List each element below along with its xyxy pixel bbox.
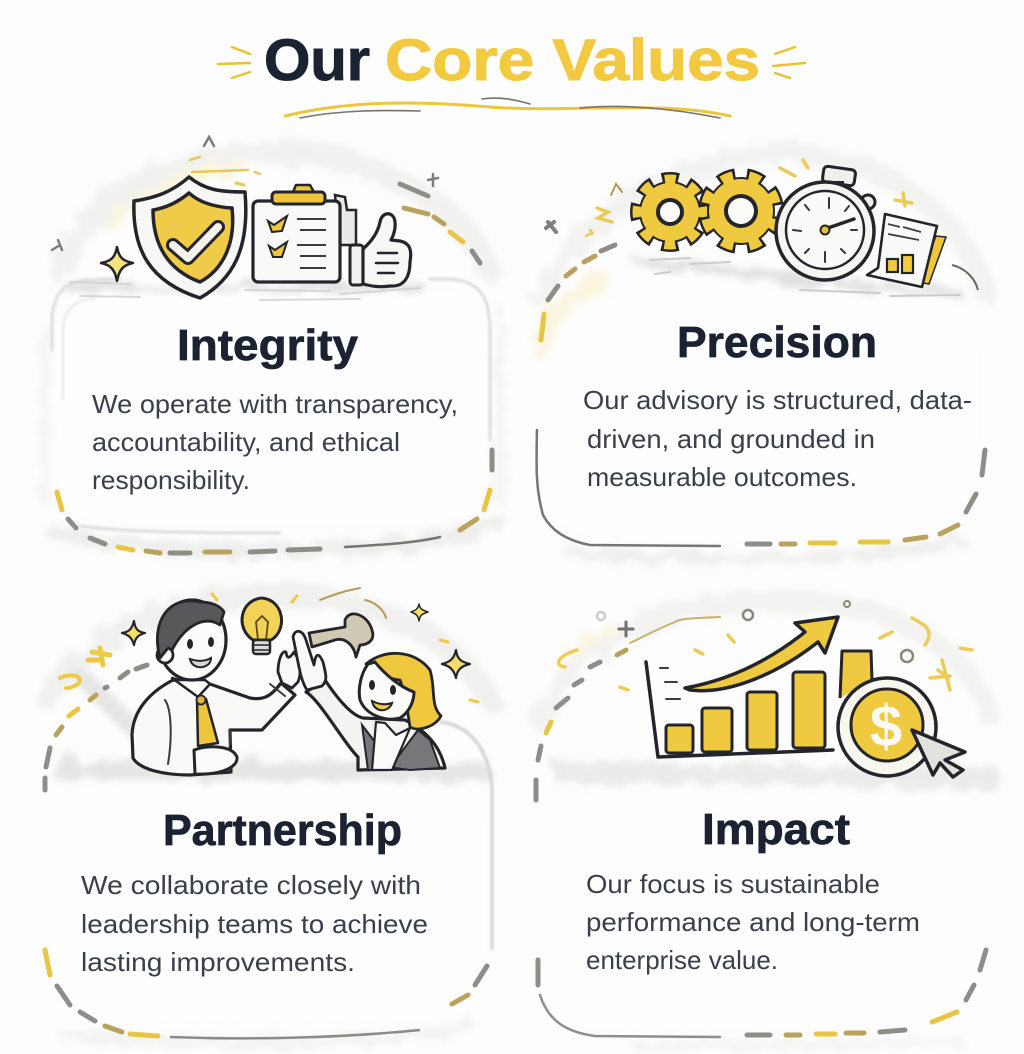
- icon: cursor: [912, 730, 965, 777]
- icon: woman: [293, 631, 445, 770]
- heading: integrity: Integrity: [177, 321, 359, 370]
- wash: precision: [540, 152, 985, 559]
- card outline: impact: [546, 795, 976, 1026]
- icon: dollar coin: $: [870, 694, 902, 759]
- text: partnership: [81, 870, 428, 977]
- text: impact: [586, 869, 920, 975]
- icon: wrench: [309, 614, 373, 657]
- icon: stopwatch: [776, 166, 875, 280]
- text: precision: Our advisory is structured, data-: [583, 385, 972, 415]
- title: Our: [264, 28, 370, 93]
- title: [218, 28, 805, 118]
- wash: partnership: [45, 595, 490, 1043]
- dashed border: precision: [537, 245, 985, 546]
- title: Core Values: [385, 28, 760, 93]
- text: precision: driven, and grounded in: [587, 424, 875, 454]
- icon: light bulb: [242, 598, 282, 654]
- heading: partnership: Partnership: [163, 806, 402, 855]
- text: integrity: accountability, and ethical: [92, 427, 400, 457]
- icon: report: [867, 214, 946, 287]
- panel: integrity: [45, 137, 500, 553]
- text: precision: measurable outcomes.: [587, 462, 857, 492]
- tie: [197, 699, 218, 746]
- confetti: integrity: [52, 137, 438, 250]
- icon: bar chart: [646, 651, 872, 757]
- dashed border: partnership: [45, 665, 492, 1038]
- confetti: precision: [546, 160, 912, 236]
- heading: impact: Impact: [702, 805, 850, 854]
- text: partnership: We collaborate closely with: [81, 870, 421, 900]
- card outline: precision: [548, 298, 975, 535]
- icon: clipboard: [253, 185, 356, 282]
- confetti: impact: [559, 601, 972, 690]
- text: integrity: [92, 389, 458, 495]
- icon: gears: [637, 164, 788, 258]
- text: integrity: responsibility.: [92, 465, 250, 495]
- text: partnership: lasting improvements.: [81, 947, 355, 977]
- confetti: partnership: [60, 588, 478, 702]
- text: precision: [583, 385, 972, 492]
- text: impact: performance and long-term: [586, 907, 920, 937]
- card outline: integrity: [52, 279, 490, 533]
- ground streaks: integrity: [70, 282, 420, 300]
- icon: sparkle: [101, 247, 133, 281]
- icon: growth arrow: [685, 617, 838, 691]
- wash: impact: [540, 600, 990, 1046]
- panel: partnership: [45, 588, 492, 1043]
- dashed border: integrity: [57, 184, 492, 553]
- icon: thumbs up: [350, 214, 411, 287]
- icon: dollar coin: [838, 678, 936, 776]
- heading: precision: Precision: [677, 318, 877, 367]
- dashed border: impact: [536, 617, 986, 1037]
- card outline: partnership: [56, 790, 482, 1022]
- icon: man: [132, 600, 300, 775]
- panel: precision: [537, 152, 985, 559]
- ground streaks: precision: [650, 258, 960, 296]
- text: integrity: We operate with transparency,: [92, 389, 458, 419]
- text: partnership: leadership teams to achieve: [81, 909, 428, 939]
- panel: impact: [536, 600, 990, 1046]
- wash: integrity: [45, 152, 500, 551]
- text: impact: enterprise value.: [586, 945, 778, 975]
- icon: shield: [134, 177, 246, 298]
- icon: sparkles: [122, 604, 470, 678]
- text: impact: Our focus is sustainable: [586, 869, 880, 899]
